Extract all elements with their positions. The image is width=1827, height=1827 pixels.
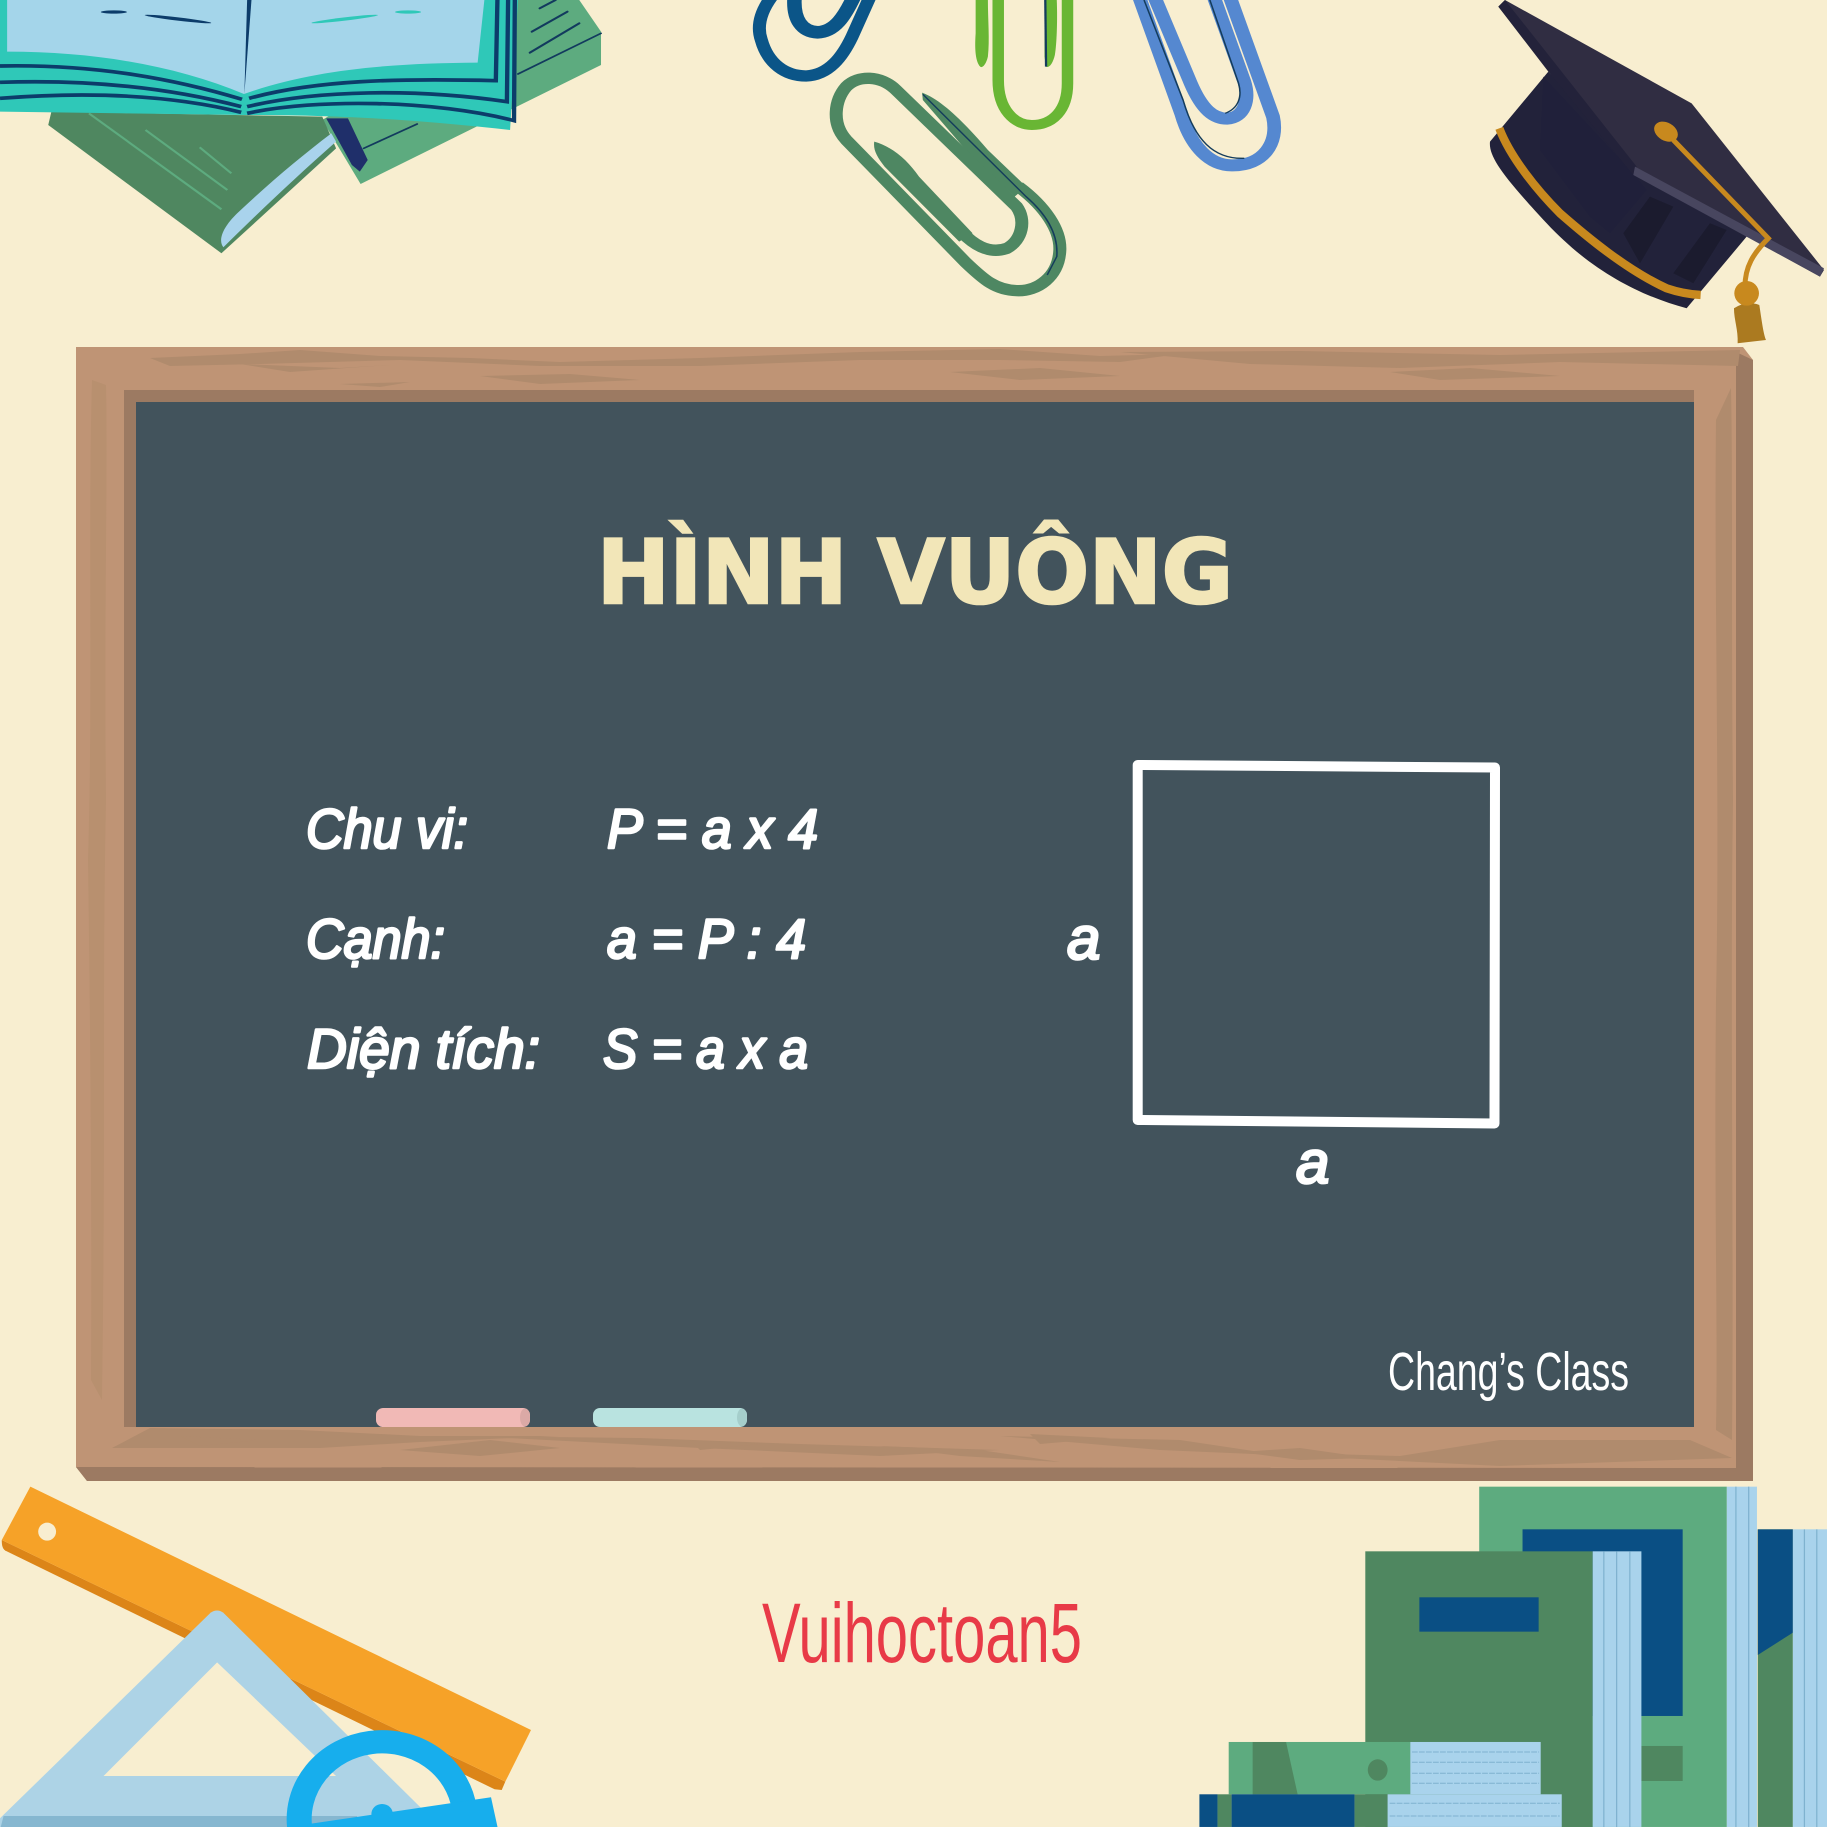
wooden frame — [76, 347, 1753, 1481]
signature: Chang’s Class — [1388, 1342, 1629, 1402]
icon: lime paper clip — [975, 0, 1067, 125]
title: HÌNH VUÔNG — [597, 521, 1233, 624]
illustration: stack of books — [1199, 1487, 1827, 1827]
formula: perimeter: P = a x 4 — [607, 797, 818, 860]
icon: set square — [0, 1610, 423, 1827]
formula: side label: Cạnh: — [306, 907, 445, 970]
icon: right book — [1758, 1529, 1827, 1827]
icon: orange ruler — [2, 1487, 531, 1790]
illustration: open book on stacked green books — [0, 0, 601, 253]
diagram: square with sides labelled a — [1067, 765, 1495, 1196]
formula: area label: Diện tích: — [307, 1017, 540, 1080]
formula: area: S = a x a — [603, 1017, 808, 1080]
icon: small flat book — [1229, 1742, 1541, 1794]
icon: steel blue paper clip — [1139, 0, 1274, 165]
formula: perimeter label: Chu vi: — [306, 797, 468, 860]
brand name: Vuihoctoan5 — [762, 1586, 1082, 1680]
pink chalk — [376, 1408, 530, 1427]
icon: green paper clip — [836, 78, 1060, 291]
blue chalk — [593, 1408, 747, 1427]
icon: back book — [1479, 1487, 1757, 1827]
label: left side a: a — [1067, 905, 1100, 972]
board surface — [136, 402, 1694, 1427]
illustration: paper clips — [759, 0, 1274, 291]
label: bottom side a: a — [1296, 1129, 1329, 1196]
icon: protractor — [299, 1742, 498, 1827]
icon: front book — [1365, 1551, 1641, 1827]
formula list — [306, 797, 818, 1080]
illustration: ruler, set square and protractor — [0, 1487, 531, 1827]
formula: side: a = P : 4 — [607, 907, 806, 970]
icon: bottom flat book — [1199, 1794, 1562, 1827]
illustration: graduation cap — [1490, 0, 1824, 343]
panel: blackboard with wooden frame — [76, 347, 1753, 1481]
icon: dark blue paper clip — [759, 0, 870, 76]
